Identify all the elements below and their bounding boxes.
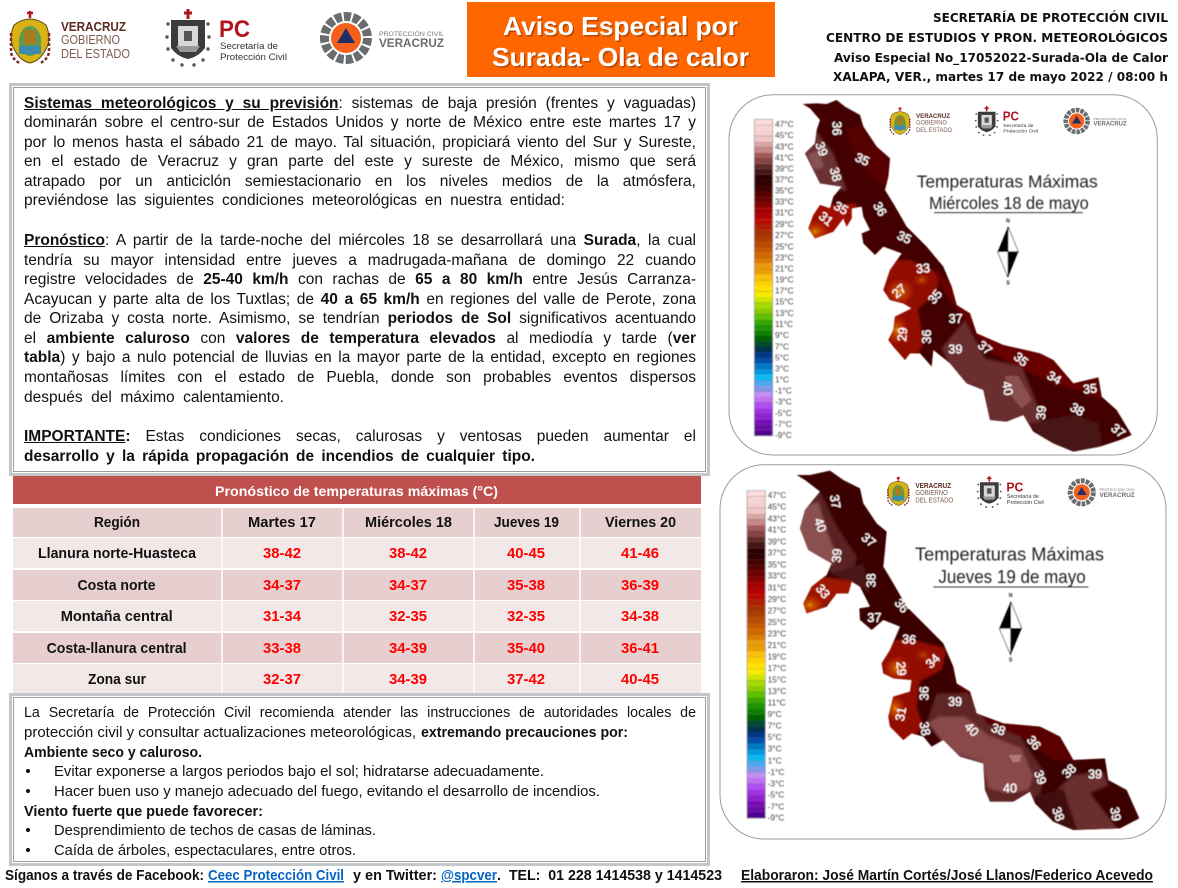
temperature legend: 17°C <box>775 286 794 296</box>
paragraph: weather systems: atrapado por un anticiclón semiestacionario en los niveles medios de la atmósfera, <box>24 173 696 190</box>
map value labels: 31 <box>893 706 909 722</box>
footer: contact and credits <box>5 867 1153 884</box>
map value labels: 29 <box>895 327 910 342</box>
temperature legend: 35°C <box>775 186 794 196</box>
logo: Protección Civil Veracruz: PROTECCIÓN CIVIL <box>379 31 445 38</box>
table title bar: Pronóstico de temperaturas máximas (°C) <box>215 483 498 499</box>
panel: recommendations <box>10 694 708 864</box>
map value labels: 39 <box>812 140 830 158</box>
panel: recommendations: extremando precauciones por: <box>421 725 628 741</box>
logo: PC Secretaría de Protección Civil: Protección Civil <box>220 52 287 63</box>
paragraph: weather systems: dominarán sobre el centro-sur de Estados Unidos y norte de México entre este martes 17 y <box>24 114 696 131</box>
row: Zona sur: 40-45 <box>621 671 659 688</box>
temperature legend: -7°C <box>775 419 792 429</box>
temperature legend: 47°C <box>768 490 786 500</box>
row: Montaña central: 31-34 <box>263 608 302 625</box>
temperature legend <box>754 119 794 440</box>
map value labels: 38 <box>1059 761 1079 781</box>
paragraph: important note: IMPORTANTE: Estas condiciones secas, calurosas y ventosas pueden aumentar el <box>24 428 696 445</box>
map value labels: 37 <box>1108 421 1128 441</box>
temperature legend: -3°C <box>768 778 784 788</box>
row: Zona sur: 32-37 <box>263 671 301 688</box>
map logos: VERACRUZ <box>915 482 952 490</box>
footer: contact and credits: @spcver <box>441 867 497 884</box>
icon: north arrow: N <box>1009 593 1013 599</box>
map value labels: 29 <box>893 661 909 676</box>
temperature legend: -3°C <box>775 397 792 407</box>
temperature legend: 5°C <box>768 732 782 742</box>
map title: Miércoles 18 de mayo <box>929 193 1089 213</box>
map logos: DEL ESTADO <box>916 127 952 134</box>
row: Costa norte: 34-37 <box>389 577 427 594</box>
temperature legend: 13°C <box>775 308 794 318</box>
row: Zona sur: Zona sur <box>88 671 146 688</box>
map logos: GOBIERNO <box>916 120 947 127</box>
map title: Temperaturas Máximas <box>917 171 1098 191</box>
row: Costa-llanura central: 35-40 <box>507 640 545 657</box>
row: Montaña central <box>13 601 701 631</box>
map: Veracruz temperatures <box>795 97 1137 457</box>
map value labels: 39 <box>1107 806 1123 822</box>
temperature legend: 37°C <box>775 175 794 185</box>
panel: recommendations: Viento fuerte que puede favorecer: <box>24 804 263 820</box>
table header row: Jueves 19 <box>494 514 559 531</box>
map logos: DEL ESTADO <box>915 497 954 505</box>
temperature legend: 19°C <box>775 275 794 285</box>
temperature legend: 27°C <box>768 605 786 615</box>
icon: north arrow: N <box>1006 218 1010 224</box>
map value labels: 37 <box>949 312 963 326</box>
map value labels: 27 <box>889 281 909 301</box>
logo: PC Secretaría de Protección Civil <box>165 9 287 67</box>
agency header text: Aviso Especial No_17052022-Surada-Ola de Calor <box>834 51 1168 66</box>
icon: north arrow: S <box>1006 281 1010 287</box>
temperature legend: 17°C <box>768 663 786 673</box>
temperature legend: 25°C <box>768 617 786 627</box>
paragraph: forecast: montañosas límites con el estado de Puebla, donde son probables eventos dispersos <box>24 369 696 386</box>
map logos: GOBIERNO <box>915 489 948 497</box>
paragraph: weather systems <box>24 95 696 209</box>
map value labels: 35 <box>853 150 872 169</box>
temperature legend: 47°C <box>775 119 794 129</box>
row: Llanura norte-Huasteca: 41-46 <box>621 545 659 562</box>
temperature legend: 31°C <box>768 582 786 592</box>
temperature legend: 43°C <box>768 513 786 523</box>
panel: recommendations: Caída de árboles, espectaculares, entre otros. <box>54 843 356 859</box>
map logos: Secretaría de <box>1007 494 1039 500</box>
map logos: VERACRUZ <box>1100 492 1135 499</box>
logo: Veracruz Gobierno del Estado: GOBIERNO <box>61 32 120 47</box>
temperature legend: 33°C <box>775 197 794 207</box>
map logos: Protección Civil <box>1007 500 1044 506</box>
temperature legend: 3°C <box>775 363 789 373</box>
temperature legend: 19°C <box>768 651 786 661</box>
map value labels: 39 <box>829 548 845 563</box>
row: Costa norte: 36-39 <box>621 577 659 594</box>
map value labels: 38 <box>1068 400 1087 419</box>
temperature legend: 21°C <box>768 640 786 650</box>
map value labels: 37 <box>975 338 995 358</box>
temperature legend: 5°C <box>775 352 789 362</box>
paragraph: weather systems: Sistemas meteorológicos y su previsión: sistemas de baja presión (frentes y vaguadas) <box>24 95 696 112</box>
temperature legend: 29°C <box>775 219 794 229</box>
temperature legend: 33°C <box>768 571 786 581</box>
temperature legend: 23°C <box>775 252 794 262</box>
temperature legend <box>747 490 786 823</box>
map value labels: 37 <box>827 494 843 510</box>
agency header text <box>826 10 1168 84</box>
paragraph: important note: desarrollo y la rápida propagación de incendios de cualquier tipo. <box>24 448 535 465</box>
paragraph: forecast: Acayucan y parte alta de los Tuxtlas; de 40 a 65 km/h en regiones del valle de Perote, zona <box>24 291 696 308</box>
footer: contact and credits: y en Twitter: <box>353 867 437 884</box>
title banner: Aviso Especial por <box>504 12 740 42</box>
row: Costa-llanura central: 36-41 <box>621 640 659 657</box>
footer: contact and credits: Síganos a través de Facebook: <box>5 867 204 884</box>
map logos: PROTECCIÓN CIVIL <box>1100 487 1135 492</box>
paragraph: forecast: de Orizaba y costa norte. Asimismo, se tendrían periodos de Sol significativos acentuando <box>24 310 696 327</box>
row: Montaña central: Montaña central <box>61 608 173 625</box>
temperature legend: 15°C <box>775 297 794 307</box>
map value labels: 36 <box>901 632 917 647</box>
map value labels: 38 <box>864 573 878 587</box>
temperature legend: 1°C <box>768 755 782 765</box>
footer: contact and credits: Elaboraron: José Martín Cortés/José Llanos/Federico Acevedo <box>741 867 1153 884</box>
row: Montaña central: 34-38 <box>621 608 659 625</box>
paragraph: forecast: tabla) y bajo a nulo potencial de lluvias en la mayor parte de la entidad, excepto en regiones <box>24 349 696 366</box>
temperature legend: -5°C <box>775 408 792 418</box>
temperature legend: 41°C <box>775 152 794 162</box>
map value labels: 36 <box>1024 733 1044 753</box>
map value labels: 37 <box>859 530 878 550</box>
map value labels: 39 <box>1088 767 1102 781</box>
map: Veracruz temperatures <box>793 467 1143 835</box>
temperature legend: 9°C <box>768 709 782 719</box>
temperature legend: 45°C <box>768 502 786 512</box>
map value labels: 36 <box>892 596 911 616</box>
temperature legend: 7°C <box>768 721 782 731</box>
agency header text: XALAPA, VER., martes 17 de mayo 2022 / 08:00 h <box>833 70 1168 84</box>
map logos <box>888 476 1135 508</box>
temperature legend: 39°C <box>768 536 786 546</box>
map value labels: 36 <box>920 330 934 344</box>
title banner: Surada- Ola de calor <box>494 44 750 74</box>
map value labels: 39 <box>948 695 962 709</box>
temperature legend: 39°C <box>775 163 794 173</box>
map value labels: 39 <box>948 342 962 356</box>
map logos: PC <box>1006 480 1024 495</box>
row: Montaña central: 32-35 <box>507 608 545 625</box>
temperature legend: 23°C <box>768 628 786 638</box>
temperature legend: 11°C <box>768 698 786 708</box>
temperature legend: 43°C <box>775 141 794 151</box>
temperature legend: -1°C <box>775 386 792 396</box>
paragraph: forecast: el ambiente caluroso con valores de temperatura elevados al mediodía y tarde (ver <box>24 330 696 347</box>
table header row: Martes 17 <box>248 514 316 531</box>
panel: map Thursday 19 May <box>720 465 1166 839</box>
map value labels: 40 <box>811 516 829 534</box>
row: Zona sur: 37-42 <box>507 671 545 688</box>
paragraph: forecast: tendría su mayor intensidad entre jueves a madrugada-mañana de domingo 22 cuando <box>24 252 696 269</box>
temperature legend: 1°C <box>775 375 789 385</box>
row: Costa-llanura central: 33-38 <box>263 640 301 657</box>
map value labels: 38 <box>989 721 1007 739</box>
temperature legend: 35°C <box>768 559 786 569</box>
temperature legend: 21°C <box>775 263 794 273</box>
panel: forecast text frame <box>10 84 708 474</box>
map value labels: 36 <box>918 686 932 700</box>
icon: north arrow: S <box>1009 658 1013 664</box>
map value labels: 38 <box>1049 805 1067 823</box>
map value labels: 33 <box>915 261 931 276</box>
temperature legend: 13°C <box>768 686 786 696</box>
row: Llanura norte-Huasteca: 40-45 <box>507 545 545 562</box>
row: Costa norte: Costa norte <box>78 577 156 594</box>
map value labels <box>812 121 1128 441</box>
map value labels: 35 <box>895 228 914 247</box>
map title <box>917 171 1098 213</box>
temperature legend: -9°C <box>768 813 784 823</box>
row: Llanura norte-Huasteca <box>13 538 701 568</box>
temperature legend: 29°C <box>768 594 786 604</box>
row: Montaña central: 32-35 <box>389 608 427 625</box>
paragraph: forecast <box>24 232 696 406</box>
paragraph: forecast: Pronóstico: A partir de la tarde-noche del miércoles 18 se desarrollará una Surada, la cual <box>24 232 696 249</box>
panel: recommendations: Ambiente seco y caluroso. <box>24 745 202 761</box>
map logos: Protección Civil <box>1003 129 1038 135</box>
paragraph: weather systems: por lo menos hasta el sábado 21 de mayo. Tal situación, propiciará viento del Sur y Sureste, <box>24 134 696 151</box>
temperature legend: 27°C <box>775 230 794 240</box>
map title: Temperaturas Máximas <box>915 544 1104 565</box>
map value labels: 39 <box>1034 405 1049 420</box>
map logos: VERACRUZ <box>916 113 950 120</box>
row: Costa-llanura central: 34-39 <box>389 640 427 657</box>
row: Costa norte: 34-37 <box>263 577 301 594</box>
map title <box>915 544 1104 587</box>
logo: PC Secretaría de Protección Civil: PC <box>219 16 250 43</box>
map value labels <box>811 494 1123 823</box>
table header row: Región <box>94 514 140 531</box>
paragraph: important note <box>24 428 696 465</box>
logo: Veracruz Gobierno del Estado: DEL ESTADO <box>61 46 130 61</box>
agency header text: CENTRO DE ESTUDIOS Y PRON. METEOROLÓGICOS <box>826 30 1168 45</box>
row: Costa norte: 35-38 <box>507 577 545 594</box>
row: Costa-llanura central: Costa-llanura central <box>47 640 187 657</box>
map logos: VERACRUZ <box>1093 121 1127 128</box>
temperature legend: 11°C <box>775 319 793 329</box>
panel: map Wednesday 18 May <box>729 95 1157 457</box>
map value labels: 35 <box>831 199 850 218</box>
temperature legend: 15°C <box>768 675 786 685</box>
map value labels: 40 <box>999 380 1015 397</box>
temperature legend: -7°C <box>768 801 784 811</box>
map value labels: 38 <box>827 166 844 183</box>
map value labels: 37 <box>867 611 881 625</box>
logo: PC Secretaría de Protección Civil: Secretaría de <box>220 41 278 52</box>
map value labels: 40 <box>962 720 981 739</box>
text block: forecast narrative <box>24 95 696 465</box>
logo: Protección Civil Veracruz: VERACRUZ <box>379 36 444 50</box>
paragraph: forecast: después del máximo calentamiento. <box>24 389 284 406</box>
map value labels: 39 <box>1031 768 1049 786</box>
panel: recommendations: protección civil y consultar actualizaciones meteorológicas, <box>24 725 416 741</box>
paragraph: forecast: registre velocidades de 25-40 km/h con rachas de 65 a 80 km/h entre Jesús Carranza- <box>24 271 696 288</box>
map value labels: 33 <box>813 582 833 601</box>
paragraph: weather systems: previéndose las siguientes condiciones meteorológicas en nuestra entidad: <box>24 192 565 209</box>
temperature legend: 3°C <box>768 744 782 754</box>
temperature legend: 41°C <box>768 525 786 535</box>
row: Zona sur <box>13 664 701 694</box>
map title: Jueves 19 de mayo <box>938 566 1086 587</box>
temperature legend: -5°C <box>768 790 784 800</box>
temperature legend: 37°C <box>768 548 786 558</box>
temperature legend: 9°C <box>775 330 789 340</box>
map value labels: 40 <box>1003 781 1017 795</box>
title banner: Surada- Ola de calor <box>492 42 749 72</box>
row: Llanura norte-Huasteca: Llanura norte-Huasteca <box>38 545 197 562</box>
map value labels: 36 <box>829 121 843 135</box>
table title bar <box>13 476 701 504</box>
temperature legend: 45°C <box>775 130 794 140</box>
map value labels: 35 <box>925 287 945 307</box>
panel: recommendations: Hacer buen uso y manejo adecuado del fuego, evitando el desarrollo de incendios. <box>54 784 600 800</box>
agency header text: SECRETARÍA DE PROTECCIÓN CIVIL <box>933 10 1168 25</box>
map value labels: 35 <box>1082 381 1098 397</box>
footer: contact and credits: Ceec Protección Civil <box>208 867 344 884</box>
map logos: PC <box>1003 110 1019 124</box>
temperature legend: -9°C <box>775 430 792 440</box>
table: maximum temperature forecast <box>13 476 701 694</box>
panel: recommendations: La Secretaría de Protección Civil recomienda atender las instrucciones de autoridades locales de <box>24 705 696 721</box>
map value labels: 34 <box>923 651 943 671</box>
panel: recommendations: Evitar exponerse a largos periodos bajo el sol; hidratarse adecuadamente. <box>54 764 544 780</box>
row: Costa-llanura central <box>13 633 701 663</box>
table header row: Miércoles 18 <box>365 514 452 531</box>
temperature legend: 31°C <box>775 208 794 218</box>
map value labels: 31 <box>816 209 836 229</box>
row: Llanura norte-Huasteca: 38-42 <box>389 545 427 562</box>
temperature legend: 7°C <box>775 341 789 351</box>
logo: Veracruz Gobierno del Estado <box>11 11 130 63</box>
map logos: PROTECCIÓN CIVIL <box>1093 116 1127 121</box>
row: Costa norte <box>13 570 701 600</box>
map value labels: 35 <box>1011 350 1031 369</box>
title banner: Aviso Especial por <box>503 11 738 41</box>
map value labels: 34 <box>1045 368 1064 388</box>
map logos: Secretaría de <box>1003 123 1034 129</box>
icon: north arrow <box>998 218 1018 287</box>
row: Llanura norte-Huasteca: 38-42 <box>263 545 301 562</box>
icon: north arrow <box>999 593 1022 664</box>
title banner <box>467 2 775 77</box>
row: Zona sur: 34-39 <box>389 671 427 688</box>
temperature legend: -1°C <box>768 767 784 777</box>
footer: contact and credits: . TEL: 01 228 1414538 y 1414523 <box>497 867 722 884</box>
table header row: Viernes 20 <box>605 514 676 531</box>
panel: recommendations: Desprendimiento de techos de casas de láminas. <box>54 823 376 839</box>
logo: Protección Civil Veracruz <box>324 16 445 60</box>
map value labels: 36 <box>870 200 889 219</box>
table header row <box>13 508 701 537</box>
logo: Veracruz Gobierno del Estado: VERACRUZ <box>61 19 126 34</box>
map logos <box>890 106 1127 136</box>
paragraph: weather systems: en el estado de Veracruz y gran parte del este y sureste de México, mismo que será <box>24 153 696 170</box>
temperature legend: 25°C <box>775 241 794 251</box>
map value labels: 38 <box>917 721 933 737</box>
